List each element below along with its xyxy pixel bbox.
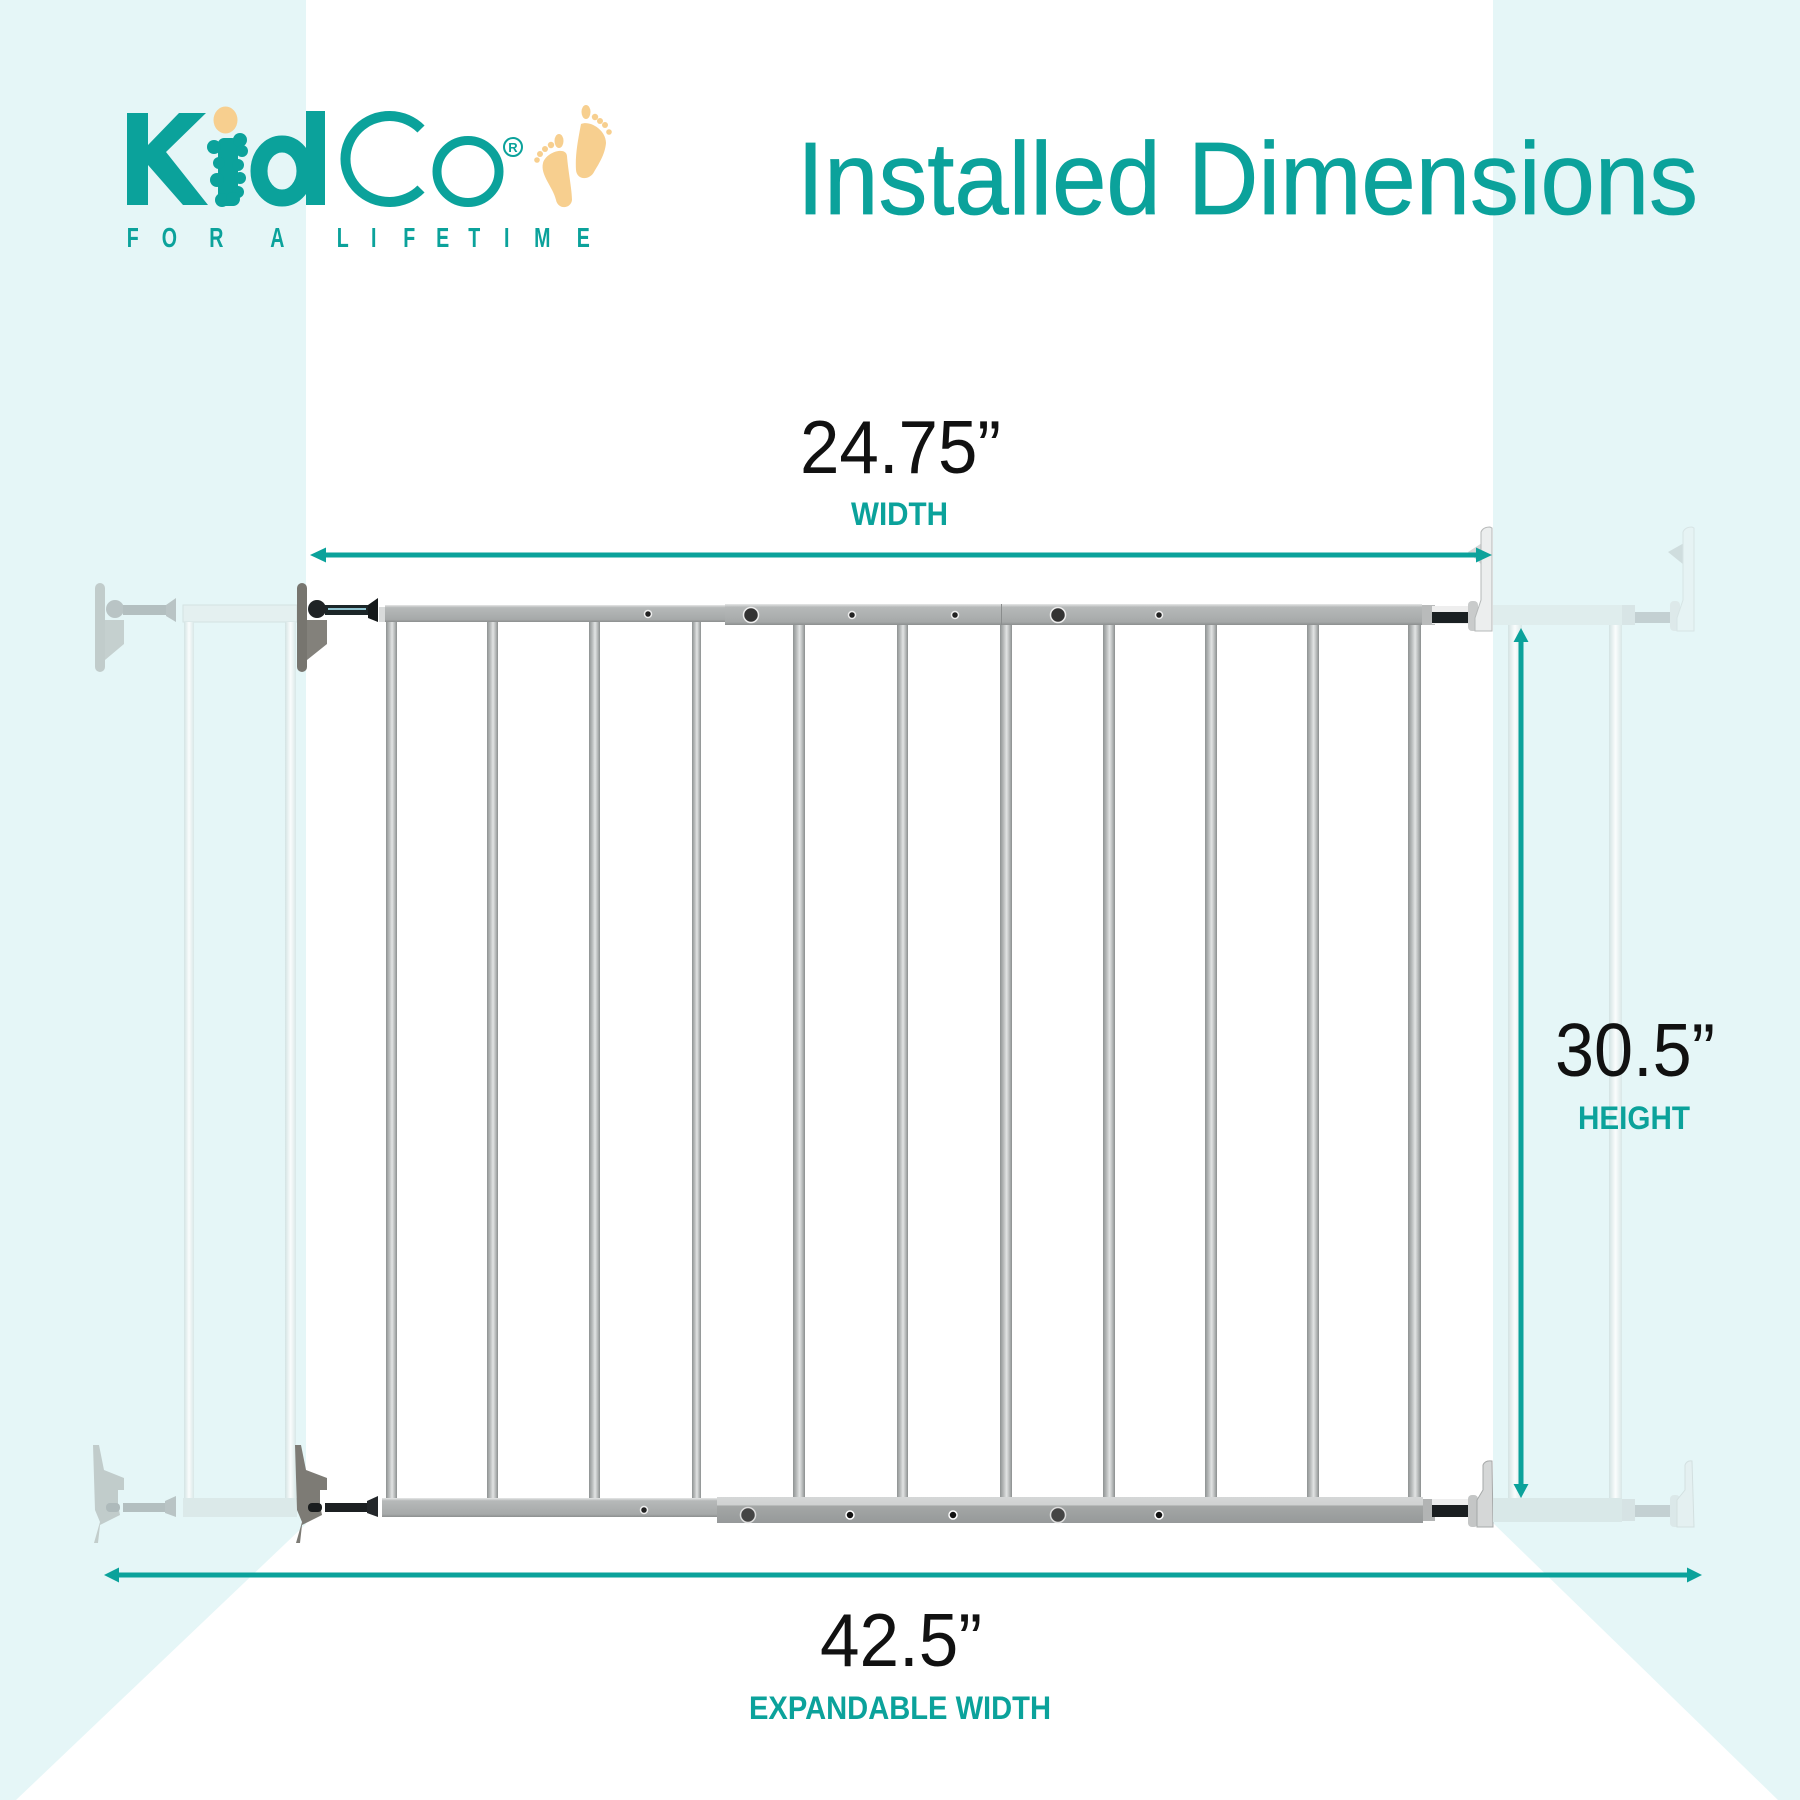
- gate: vertical bars: [386, 620, 1421, 1500]
- logo: KidCo: [127, 105, 612, 254]
- dimension: expandable width value: 42.5”: [820, 1598, 982, 1682]
- logo tagline: FOR A LIFETIME: [127, 223, 590, 254]
- dimension: expandable width label: EXPANDABLE WIDTH: [749, 1690, 1051, 1726]
- left bottom mount: [295, 1445, 378, 1543]
- logo registered mark: R: [508, 140, 518, 155]
- logo letter K: [127, 113, 208, 205]
- logo letter C: [345, 116, 421, 202]
- dimension: height value: 30.5”: [1555, 1008, 1715, 1092]
- title: Installed Dimensions: [797, 121, 1698, 236]
- arrow: width: [310, 548, 1492, 562]
- arrow: height: [1514, 628, 1528, 1498]
- arrow: expandable width: [104, 1568, 1702, 1582]
- logo letter d: [259, 111, 325, 205]
- faded left extension panel: [183, 605, 297, 1517]
- gate: top rail: [379, 604, 1422, 625]
- logo letter o: [437, 140, 499, 202]
- faded left bottom mount: [93, 1445, 176, 1543]
- dimension: height label: HEIGHT: [1578, 1100, 1690, 1136]
- dimension: width label: WIDTH: [851, 496, 948, 532]
- faded right top mount: [1622, 527, 1694, 631]
- faded right extension panel: [1493, 605, 1622, 1522]
- logo letter i with orange dot: [207, 106, 248, 207]
- faded left top mount: [95, 583, 176, 672]
- left top mount: [297, 583, 378, 672]
- gate: bottom rail: [382, 1497, 1423, 1523]
- right bottom mount: [1423, 1461, 1493, 1527]
- dimension: width value: 24.75”: [800, 405, 1001, 489]
- logo icon: footprints: [534, 105, 612, 207]
- right top mount: [1422, 527, 1492, 631]
- logo registered mark: [504, 138, 522, 156]
- faded right bottom mount: [1622, 1461, 1694, 1527]
